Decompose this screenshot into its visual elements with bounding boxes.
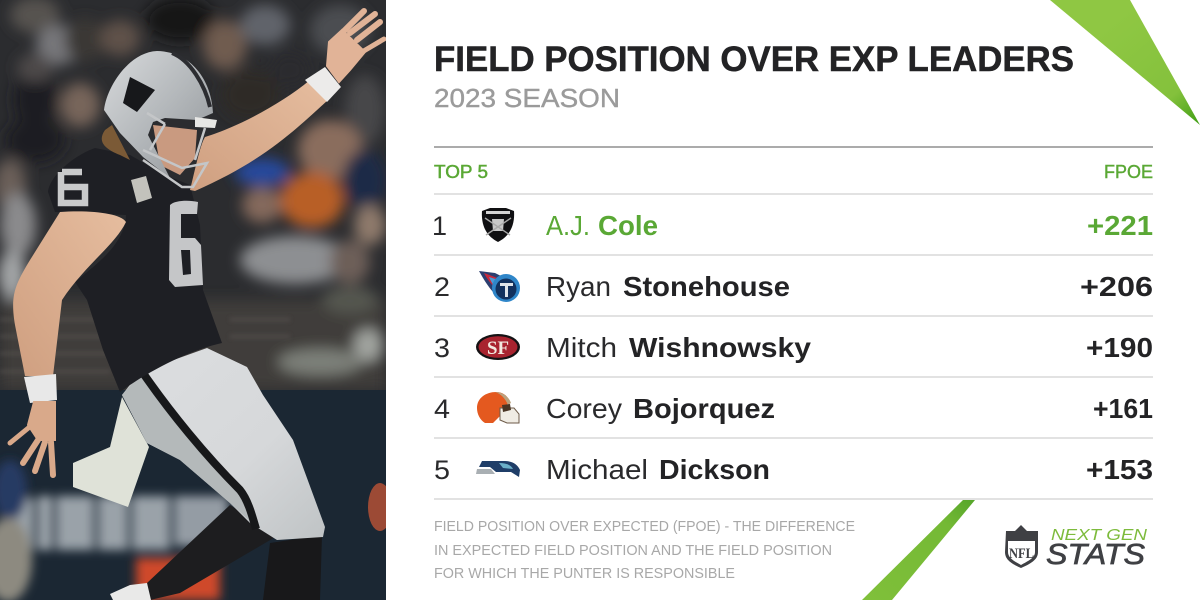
icon: Seahawks [476,461,520,477]
table header [434,162,1153,182]
row 3: Mitch Wishnowsky [434,332,1153,363]
footnote [434,519,855,582]
jersey number shoulder [61,172,85,203]
Next Gen Stats wordmark: NEXT GEN [1051,527,1148,544]
title: FIELD POSITION OVER EXP LEADERS [434,39,1074,79]
NFL shield logo [1005,525,1038,568]
NFL shield logo: NFL [1009,546,1034,562]
towel [73,397,149,507]
table header: TOP 5 [434,162,488,182]
row 3: Mitch Wishnowsky: +190 [1086,332,1153,363]
football [368,483,386,531]
row 4: Corey Bojorquez: +161 [1093,393,1153,424]
row 5: Michael Dickson: Michael [546,454,648,485]
panel: punter photo [0,0,392,600]
row 5: Michael Dickson: 5 [434,455,450,485]
row 1: A.J. Cole: Cole [598,210,658,241]
row 2: Ryan Stonehouse [434,271,1153,302]
captain patch [131,176,152,203]
row 3: Mitch Wishnowsky: Mitch [546,332,617,363]
row 2: Ryan Stonehouse: Stonehouse [623,271,790,302]
row 2: Ryan Stonehouse: +206 [1080,271,1153,302]
row 3: Mitch Wishnowsky: 3 [434,333,450,363]
icon: Browns helmet [477,392,519,423]
helmet raiders decal [123,77,155,112]
row 4: Corey Bojorquez: Bojorquez [633,393,775,424]
row 4: Corey Bojorquez [434,392,1153,424]
helmet bumper [195,117,217,128]
subtitle: 2023 SEASON [434,83,620,113]
left hand [10,402,55,475]
row 5: Michael Dickson [434,454,1153,485]
player far leg [263,535,322,600]
row 1: A.J. Cole: +221 [1087,210,1153,241]
left wristband [24,374,57,403]
row 4: Corey Bojorquez: Corey [546,393,622,424]
hair [102,125,130,160]
player kicking leg [147,505,277,600]
stadium fence bands [1,318,12,374]
face [153,125,197,175]
icon: Raiders shield [482,208,514,242]
pants stripe [143,373,256,529]
row 2: Ryan Stonehouse: Ryan [546,271,611,302]
left arm [13,211,126,376]
right arm [190,80,328,191]
footnote: FOR WHICH THE PUNTER IS RESPONSIBLE [434,566,735,582]
right wristband [305,67,341,102]
table header: FPOE [1104,162,1153,182]
blurred wall lettering and foreground shapes [0,460,228,600]
footnote: FIELD POSITION OVER EXPECTED (FPOE) - THE DIFFERENCE [434,519,855,535]
top-right green slash [1050,0,1200,125]
pants shaded back panel [122,374,254,525]
jersey number chest [169,201,203,287]
row 2: Ryan Stonehouse: 2 [434,272,450,302]
row 5: Michael Dickson: +153 [1086,454,1153,485]
Next Gen Stats wordmark [1046,527,1148,571]
facemask [143,113,207,187]
player shoe [110,583,151,600]
bottom green slash [862,500,975,600]
icon: Titans [479,271,520,302]
icon: 49ers: SF [487,338,509,359]
table rules [434,146,1153,500]
jersey [48,148,222,392]
pants [122,348,325,540]
footnote: IN EXPECTED FIELD POSITION AND THE FIELD POSITION [434,543,832,559]
arena wall [0,390,386,600]
row 1: A.J. Cole [432,208,1153,242]
icon: 49ers [476,334,520,360]
row 5: Michael Dickson: Dickson [659,454,770,485]
helmet [104,51,213,178]
crowd background [0,0,387,390]
row 4: Corey Bojorquez: 4 [434,394,450,424]
right hand [327,11,384,82]
Next Gen Stats wordmark: STATS [1046,539,1146,571]
row 3: Mitch Wishnowsky: Wishnowsky [629,332,811,363]
helmet stripe [172,53,210,107]
row 1: A.J. Cole: A.J. [546,210,590,241]
row 1: A.J. Cole: 1 [432,211,447,241]
